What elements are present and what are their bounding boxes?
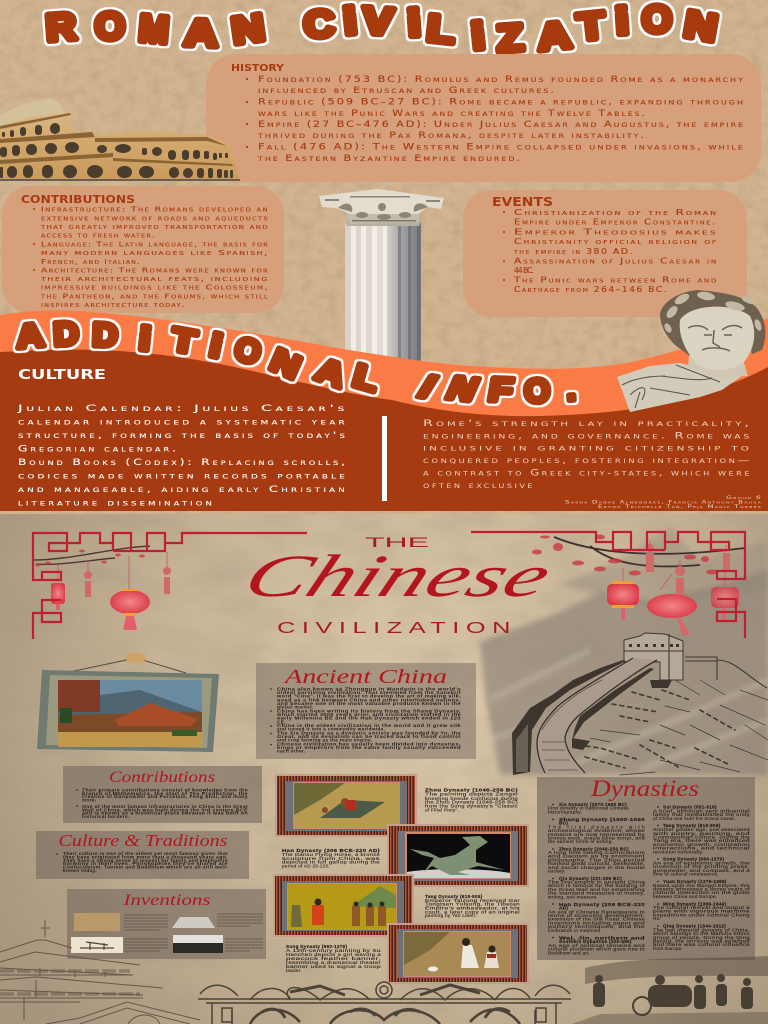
text column: dynasties right: between China and Europe. <box>653 894 717 899</box>
text column: dynasties right: Tang era, there was enhanced <box>653 838 750 843</box>
band: dark rust section <box>0 350 768 511</box>
text column: dynasties right: Cosmopolitan culture. During the <box>653 834 750 840</box>
heading: Additional Info: . <box>565 370 577 407</box>
text block: contributions china <box>76 788 248 819</box>
text column: dynasties right: group of people. During the Qing <box>653 935 750 940</box>
list: contributions bullets: French, and Italian. <box>41 258 141 266</box>
text block: ancient china bullets: China is the oldest civilization in the world and it grew silk <box>277 723 461 728</box>
background: roman parchment <box>0 0 768 515</box>
text block: culture and traditions: harmony in their lives. Philosophies they've shared are <box>63 861 228 866</box>
text column: dynasties left: and Daoism as its prominent <box>548 854 646 858</box>
text block: culture left: codices made written records portable <box>18 472 348 482</box>
text block: contributions china: branch of Mathematics, the start of Tea Production, the <box>82 791 248 796</box>
list: contributions bullets: their architectural feats, including <box>39 275 269 283</box>
title: Roman Civilization: i <box>406 1 422 45</box>
text column: dynasties right: from Europe. <box>653 946 683 951</box>
text column: dynasties right: Ho. <box>653 916 661 921</box>
text block: culture right: inclusive in granting citizenship to <box>423 444 752 454</box>
title: Roman Civilization: O <box>95 5 125 48</box>
list: history bullets: the Eastern Byzantine Empire endured. <box>257 154 522 164</box>
heading: dynasties: Dynasties <box>590 776 699 801</box>
text block: ancient china bullets: early Millennia BE and the Han Dynasty which ended in 220 <box>277 716 461 721</box>
caption: Han dynasty: The Gansu Flying Horse, a bronze <box>282 852 380 857</box>
text block: culture right: a contrast to Greek city-states, which were <box>423 468 752 478</box>
text block: ancient china bullets: and became one of the most valuable products known in the <box>277 701 461 706</box>
text column: dynasties right: Sui Dynasty (581-618) <box>663 804 717 810</box>
heading: Additional Info: i <box>207 326 225 365</box>
title: Roman Civilization: N <box>681 2 721 50</box>
list: events bullets: Emperor Theodosius makes <box>514 228 718 236</box>
text block: ancient china bullets: global market. <box>277 705 314 710</box>
heading: Additional Info: O <box>230 329 265 372</box>
text column: dynasties right: period, the territory was enlarged <box>653 938 750 944</box>
text column: dynasties right: family that reestablished the unity <box>653 812 750 817</box>
title: The Chinese Civilization <box>235 534 561 637</box>
list: history bullets: wars like the Punic Wars and creating the Twelve Tables. <box>258 109 647 119</box>
image: Colosseum <box>0 98 240 181</box>
heading: contributions china: Contributions <box>109 769 215 786</box>
text block: ancient china bullets: kings or emperors from the same family usually succeeded <box>277 745 461 750</box>
text column: dynasties left: marked great cultural, believable, <box>548 861 645 866</box>
caption: Tang dynasty: Tang Dynasty (618-906) <box>425 894 483 899</box>
title: Roman Civilization: T <box>575 3 607 49</box>
text column: dynasties left: Qin Dynasty (221-206 BC) <box>559 876 622 881</box>
text block: culture left: literature dissemination <box>18 498 215 508</box>
divider <box>382 416 387 501</box>
text column: dynasties left: the standard measures of money, <box>548 890 645 896</box>
text block: culture left: and manageable, aiding early Christian <box>18 485 348 495</box>
image: paper sheets <box>74 913 120 931</box>
heading: Additional Info: O <box>524 372 550 409</box>
text column: dynasties left: which is famous for the building of <box>548 883 646 888</box>
text block: ancient china bullets: The Xia Dynasty as a dynastic society was founded by Yu, the <box>277 730 461 735</box>
text column: dynasties left: A long time having Confucianism <box>548 850 645 855</box>
text block: culture and traditions: known today. <box>63 868 97 873</box>
text block: contributions china: One of the most famous infrastructures in China is the Great <box>82 804 248 809</box>
text block: contributions china: historical borders. <box>82 814 130 819</box>
illustration: hanging lanterns <box>51 540 739 635</box>
panel: dynasties <box>537 776 755 960</box>
text block: ancient china bullets: CE. <box>277 719 286 724</box>
heading: culture: CULTURE <box>18 368 106 383</box>
list: events bullets: Christianity official religion of <box>514 237 718 246</box>
list: contributions bullets: that greatly improved transportation and <box>40 223 269 231</box>
heading: events: EVENTS <box>492 195 553 209</box>
illustration: great wall <box>512 633 768 775</box>
background: ink wash mountains <box>480 528 768 775</box>
ornament: red lattice corner left <box>33 533 307 639</box>
title: Roman Civilization: i <box>614 0 630 43</box>
text block: culture right: Rome's strength lay in practicality, <box>423 419 752 429</box>
heading: Additional Info: L <box>349 356 383 399</box>
list: contributions bullets: extensive network of roads and aqueducts <box>41 214 269 222</box>
text column: dynasties right: of China and built the Grand Canal. <box>653 816 736 821</box>
list: events bullets: the empire in 380 AD. <box>513 247 634 256</box>
text block: culture left <box>16 404 348 508</box>
text column: dynasties right: interactions, and technical <box>653 846 750 850</box>
caption: Zhou dynasty: Zhou Dynasty (1046-256 BC) <box>425 788 518 792</box>
text column: dynasties left: society. <box>548 868 566 874</box>
text column: dynasties left: the Great Wall and for establishing <box>548 887 645 892</box>
text column: dynasties left: and social changes in the feudal <box>548 865 645 870</box>
title: Roman Civilization: N <box>229 5 267 52</box>
credits <box>565 495 762 510</box>
text block: culture right: engineering, and governance. Rome was <box>423 432 752 442</box>
title: Roman Civilization: M <box>137 6 171 51</box>
text column: dynasties right: and there was cultural influence <box>653 942 750 947</box>
caption: Han dynasty <box>282 848 381 868</box>
credits: Ervnh Trichelle Tan, Peja Magic Torres <box>598 504 762 510</box>
list: history bullets: influenced by Etruscan and Greek cultures. <box>258 86 556 96</box>
text column: dynasties left: writing, and measure. <box>548 894 598 900</box>
heading: Additional Info: A <box>15 316 45 356</box>
title: The Chinese Civilization: CIVILIZATION <box>277 620 517 637</box>
text block: culture left: structure, forming the basis of today's <box>18 431 348 441</box>
text column: dynasties right <box>653 804 750 951</box>
caption: Han dynasty: sculpture from China, was <box>282 856 381 861</box>
heading: Additional Info: F <box>486 371 516 409</box>
list: contributions bullets: Language: The Latin language, the basis for <box>41 240 269 248</box>
text column: dynasties left: Xia Dynasty (2070-1600 BC) <box>559 802 627 807</box>
text block: culture and traditions: Their culture is one of the oldest yet most famous given that <box>63 851 228 856</box>
text block: ancient china bullets: Great, and its evolution can be traced back to flood control <box>277 734 461 739</box>
caption: Song dynasty <box>286 944 381 973</box>
panel: contributions china <box>63 766 262 823</box>
caption: Tang dynasty <box>425 894 521 918</box>
text column: dynasties left: An age of political remains and <box>548 943 645 948</box>
text column: dynasties left: remains are now represented by <box>548 832 646 837</box>
text column: dynasties left: Buddhism and art. <box>548 950 590 956</box>
heading: Additional Info: N <box>441 369 484 408</box>
caption: Zhou dynasty: the Zhou Dynasty (1046-256 BC) <box>425 800 518 804</box>
panel: culture and traditions <box>36 831 249 879</box>
background: chinese parchment <box>0 514 768 1024</box>
list: events bullets: Carthage from 264–146 BC. <box>514 285 668 294</box>
image: Corinthian column <box>319 189 444 362</box>
text block: culture and traditions: they have originated from more than a thousand years ago. <box>63 854 228 860</box>
text column: dynasties right: revolution technically. <box>653 850 703 854</box>
text column: dynasties left: archaeological evidence, whose <box>548 828 645 833</box>
text block: ancient china bullets: used as a link between China and other interlinked nations, <box>277 697 461 702</box>
list: history bullets: Foundation (753 BC): Romulus and Remus founded Rome as a monarchy <box>258 75 745 85</box>
heading: Additional Info: A <box>311 350 351 395</box>
list: history bullets <box>246 75 745 164</box>
title: Roman Civilization: L <box>425 6 457 51</box>
title: Roman Civilization: C <box>303 1 336 46</box>
caption: Song dynasty: leader. <box>286 968 302 973</box>
ornament: red lattice corner right <box>471 532 745 638</box>
text column: dynasties left: Shang Dynasty (1600-1050 <box>559 817 645 822</box>
panel: inventions <box>67 889 266 959</box>
text column: dynasties right: A brief, although very influential <box>653 808 750 814</box>
text block: culture right <box>423 419 752 491</box>
list: contributions bullets: the Pantheon, and the Forums, which still <box>40 292 269 300</box>
caption: Han dynasty: depicted in full gallop during the <box>282 860 380 864</box>
caption lines: inventions (illegible in reference) <box>124 914 263 951</box>
caption: Song dynasty: resembling a dramatical theater <box>286 960 381 965</box>
caption: Zhou dynasty: from the Song dynasty's "Classic <box>425 804 518 808</box>
list: events bullets: Assassination of Julius Caesar in <box>514 256 718 266</box>
text block: culture left: Julian Calendar: Julius Caesar's <box>16 404 348 414</box>
text column: dynasties left: First dynasty in traditional Chinese <box>548 806 629 810</box>
heading: contributions: CONTRIBUTIONS <box>21 193 135 206</box>
text block: contributions china: creation of Gunpowder and Porcelain, Feng Shui, and many <box>82 794 248 799</box>
caption: Zhou dynasty: kneeling beside Confucius during <box>425 796 518 801</box>
text block: culture and traditions: They have a strong sense of respect for family and emphasize <box>63 858 228 863</box>
caption: Zhou dynasty: of Filial Piety". <box>425 808 459 812</box>
text block: culture left: calendar introduced a systematic year <box>18 418 348 428</box>
list: contributions bullets: many modern languages like Spanish, <box>41 249 269 257</box>
text block: ancient china bullets: China has been writing its history from the Shang Dynasty, <box>277 708 461 713</box>
list: events bullets: The Punic wars between Rome and <box>513 276 718 284</box>
heading: Additional Info <box>15 315 577 409</box>
text block: contributions china: and is known as a historical place because it was built on <box>82 810 248 816</box>
text column: dynasties right: gunpowder, and compass, and a <box>653 868 750 873</box>
text block: contributions china: more. <box>82 798 97 802</box>
panel: events <box>463 190 747 317</box>
caption: Song dynasty: peacock feather banner, <box>286 956 381 961</box>
text column: dynasties right: Song Dynasty (960-1279) <box>663 856 724 862</box>
text column: dynasties left: inventions including paper and <box>548 920 645 926</box>
text column: dynasties left: historiography. <box>548 810 582 814</box>
list: contributions bullets: access to fresh water. <box>41 232 156 240</box>
text column: dynasties left: Han Dynasty (206 BCE-220 <box>559 902 645 907</box>
title: Roman Civilization: A <box>535 13 573 59</box>
picture: hanging palace painting <box>37 652 219 752</box>
panel: contributions <box>2 186 284 313</box>
text column: dynasties left: Wei, Jin, northern and <box>559 936 645 940</box>
text column: dynasties left: the earliest forms of writing. <box>548 839 613 844</box>
text block: ancient china bullets: China also known as Zhongguo in Mandarin is the world's <box>277 686 461 692</box>
title: Roman Civilization <box>45 0 721 60</box>
text block: ancient china bullets: and crop farming as the main engine. <box>277 738 373 743</box>
picture: Zhou painting in frame <box>275 774 417 837</box>
text block: ancient china bullets: which started 3000 years prior, and civilization started in the <box>276 712 461 717</box>
text column: dynasties right: time of cultural renaissance. <box>653 872 719 876</box>
list: events bullets <box>503 208 718 294</box>
caption: Tang dynasty: Emperor Taizong received Gar <box>425 898 520 903</box>
caption: Zhou dynasty: The painting depicts Zengxi <box>425 792 518 796</box>
list: events bullets: Empire under Emperor Constantine. <box>514 218 717 226</box>
text block: culture right: conquered peoples, fostering integration— <box>423 456 752 466</box>
title: Roman Civilization: i <box>470 14 487 58</box>
illustration: battle engraving <box>572 956 768 1024</box>
text block: ancient china bullets: each other. <box>277 749 306 754</box>
text column: dynasties right: plane with vigorous maritime <box>653 908 750 914</box>
image: printing photograph <box>173 935 223 953</box>
text column: dynasties left <box>548 802 646 956</box>
caption: Tang dynasty: Empire's ambassador, at his <box>425 906 521 910</box>
caption: Song dynasty: Hanchen depicts a girl waving a <box>286 952 381 957</box>
list: contributions bullets <box>33 206 269 309</box>
list: contributions bullets: inspires architecture today. <box>41 301 186 309</box>
heading: Additional Info: D <box>92 316 118 354</box>
image: gunpowder engraving <box>71 937 123 953</box>
picture: Tang painting in frame <box>273 874 414 937</box>
title: Roman Civilization: i <box>342 0 359 43</box>
text column: dynasties left: Southern Dynasties (220-589) <box>559 939 632 944</box>
credits: Group 6 <box>726 495 762 501</box>
text column: dynasties left: cultural pluralism which gave rise to <box>548 946 645 952</box>
caption: Han dynasty: period of AD 25-220. <box>282 864 330 868</box>
text column: dynasties right: expeditions under Admiral Cheng <box>653 912 750 918</box>
illustration: baroque ornament <box>198 982 571 1024</box>
panel: ancient china <box>256 663 476 759</box>
caption: Tang dynasty: painting by Yan Liben. <box>425 913 477 918</box>
list: history bullets: Republic (509 BC–27 BC): Rome became a republic, expanding through <box>258 98 745 108</box>
text column: dynasties left: An era of Chinese Renaissance in <box>548 910 645 914</box>
text block: ancient china bullets: and turned it into a commodity worldwide. <box>277 727 385 732</box>
text column: dynasties right: economic growth, civilization <box>653 842 750 847</box>
text column: dynasties left: BC) <box>559 820 568 826</box>
illustration: cherry branches <box>34 534 745 576</box>
title: Roman Civilization: R <box>45 6 78 50</box>
caption: Zhou dynasty <box>425 788 518 812</box>
heading: Additional Info: D <box>53 315 80 353</box>
list: contributions bullets: impressive buildings like the Colosseum, <box>41 284 269 292</box>
text column: dynasties left: Zhou Dynasty (1046-256 BC) <box>559 846 629 852</box>
caption: Han dynasty: Han Dynasty (206 BCE-220 AD) <box>282 848 380 853</box>
text column: dynasties left: AD) <box>559 906 568 910</box>
title: Roman Civilization: A <box>184 11 218 55</box>
text block: ancient china bullets: oldest surviving civilization. That stemmed from the Sanskrit <box>277 690 461 695</box>
illustration: pagoda line art <box>0 920 200 1024</box>
text column: dynasties right: which belongs to the Manchu ethnic <box>653 931 750 936</box>
list: history bullets: Fall (476 AD): The Western Empire collapsed under invasions, while <box>258 142 745 152</box>
text column: dynasties right: with poetry, painting, and <box>653 831 750 836</box>
heading: Additional Info: T <box>169 320 199 361</box>
text column: dynasties left: pottery techniques, and the <box>548 924 645 929</box>
text block: culture right: often exclusive <box>423 481 535 491</box>
list: events bullets: 44 BC. <box>514 266 535 275</box>
heading: Additional Info: N <box>265 341 306 386</box>
text block: contributions china: Wall of China, which was built during the 3rd century BCE <box>82 808 248 812</box>
picture: Song painting in frame <box>387 923 529 984</box>
text column: dynasties right: The cultural revival and output a <box>653 905 750 910</box>
text block: culture left: Gregorian calendar. <box>18 444 179 454</box>
text column: dynasties left: civilization in medicine. <box>548 928 602 933</box>
text column: dynasties left: bronze work, oracle bone script, and <box>548 836 645 840</box>
heading: Additional Info: i <box>138 320 152 358</box>
text column: dynasties left: philosophy. The Zhou period <box>548 858 645 862</box>
text column: dynasties right: Another golden age, one associated <box>653 827 750 832</box>
title: The Chinese Civilization: THE <box>365 534 429 550</box>
text block: contributions china: Their primary contributions consist of knowledge from the <box>82 788 248 792</box>
text column: dynasties right: The last Imperial dynasty of China, <box>653 928 750 932</box>
caption: Tang dynasty: Tongtsen Yulsung, the Tibetan <box>425 902 520 906</box>
text block: ancient china bullets: word "Cina", it was the first to develop the art of making silk, <box>276 694 461 699</box>
picture: Han bronze horse in frame <box>387 824 529 887</box>
heading: ancient china: Ancient China <box>282 666 447 688</box>
heading: culture and traditions: Culture & Traditions <box>58 831 228 850</box>
panel: history <box>206 54 761 182</box>
heading: inventions: Inventions <box>122 892 210 909</box>
credits: Sasha Danae Almendras, Francis Anthony Bausa <box>565 500 762 506</box>
text column: dynasties right: Qing Dynasty (1644-1912) <box>663 924 726 928</box>
text column: dynasties right: cultural interaction on the globe <box>653 890 750 895</box>
text column: dynasties left: terms of economic development, <box>548 913 645 918</box>
caption: Song dynasty: A 12th-century painting by Su <box>286 948 381 953</box>
text column: dynasties left: extension of the Silk Road. Chinese <box>548 916 645 922</box>
title: The Chinese Civilization: Chinese <box>235 543 561 609</box>
title: Roman Civilization: Z <box>495 16 525 60</box>
list: events bullets: Christianization of the Roman <box>514 208 718 217</box>
heading: history: HISTORY <box>231 63 285 74</box>
list: history bullets: thrived during the Pax Romana, despite later instability. <box>257 131 646 141</box>
caption: Song dynasty: banner used to signal a troop <box>286 964 381 969</box>
text column: dynasties right: Ming Dynasty (1368-1644) <box>663 902 727 906</box>
list: contributions bullets: Architecture: The Romans were known for <box>41 266 269 274</box>
text block: ancient china bullets <box>270 686 461 754</box>
caption: Tang dynasty: court, a later copy of an original <box>425 910 520 914</box>
text block: culture left: Bound Books (Codex): Replacing scrolls, <box>18 458 348 468</box>
caption: Song dynasty: Song Dynasty (960-1279) <box>286 944 347 949</box>
text column: dynasties right: invention of the printing press, <box>653 864 750 869</box>
text block: ancient china bullets: Chinese civilization has usually been divided into dynasties, <box>277 741 461 746</box>
heading: Additional Info: I <box>412 369 444 404</box>
text block: culture and traditions <box>56 851 228 873</box>
band: orange wave <box>0 310 768 511</box>
text column: dynasties right: Based upon the Mongol Empire, this <box>653 883 750 888</box>
list: history bullets: Empire (27 BC–476 AD): Under Julius Caesar and Augustus, the empire <box>258 120 745 130</box>
text column: dynasties left: The first dynasty with <box>548 824 645 830</box>
text column: dynasties right: Tang Dynasty (618-906) <box>663 823 721 828</box>
text column: dynasties right: dynasty witnessed a dozen years of <box>653 886 750 892</box>
text column: dynasties right: An era of economic growth, the <box>653 860 750 866</box>
image: compass <box>172 917 215 928</box>
text column: dynasties right: Yuan Dynasty (1279-1368) <box>663 879 727 884</box>
image: Caesar bust <box>617 290 765 412</box>
text block: culture and traditions: Confucianism, Taoism and Buddhism which are all still well- <box>63 864 228 870</box>
text column: dynasties left: The first empire in ancient China <box>548 880 645 884</box>
list: contributions bullets: Infrastructure: The Romans developed an <box>41 206 269 214</box>
